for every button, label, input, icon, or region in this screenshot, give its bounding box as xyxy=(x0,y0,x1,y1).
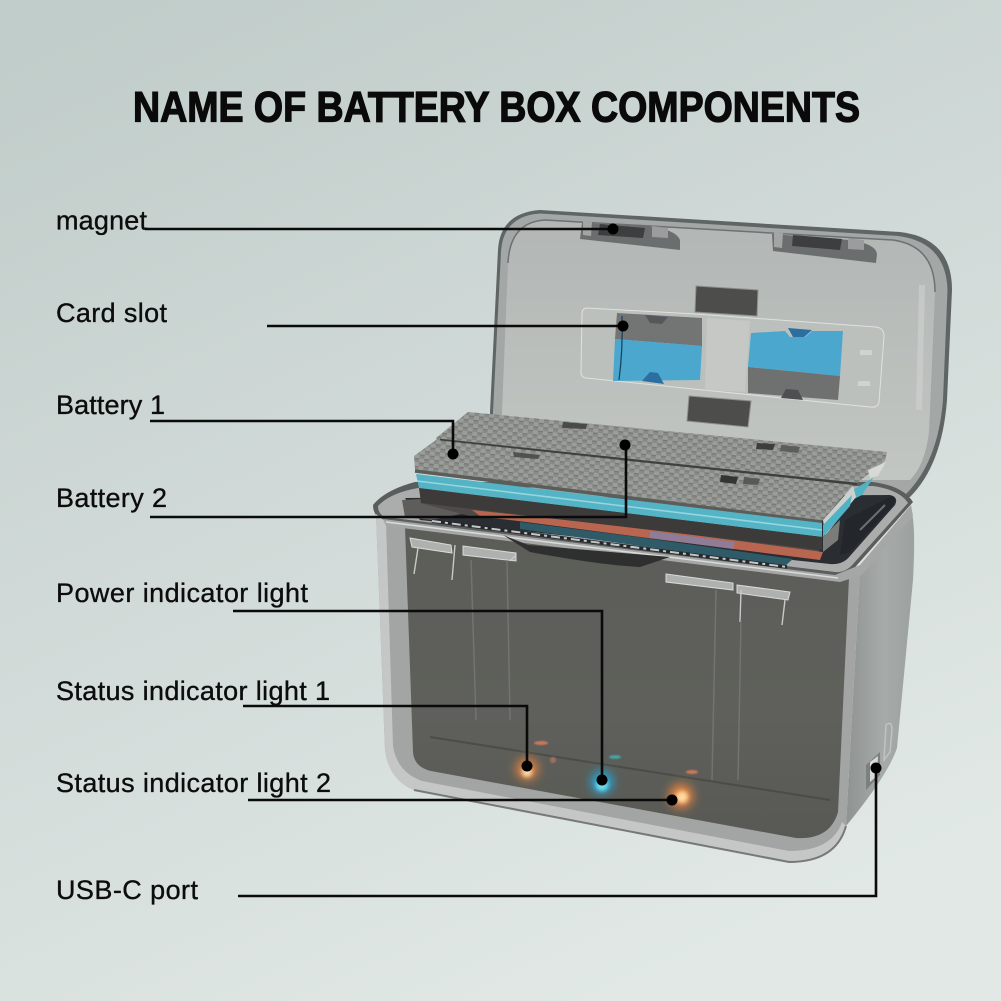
bright rim left and bottom xyxy=(376,514,846,862)
label: magnet: magnet xyxy=(56,206,147,236)
label: status indicator light 1: Status indicator light 1 xyxy=(56,676,330,706)
right side panel xyxy=(846,512,914,826)
label: status indicator light 2: Status indicator light 2 xyxy=(56,768,331,798)
battery dark underside xyxy=(419,488,822,550)
centre strip xyxy=(705,318,750,392)
label: battery 1: Battery 1 xyxy=(56,390,165,420)
rim glass xyxy=(378,486,908,572)
right memory card xyxy=(748,328,843,400)
salmon band xyxy=(472,510,823,560)
label: magnet xyxy=(56,206,618,236)
label: battery 2 xyxy=(56,440,630,517)
title: NAME OF BATTERY BOX COMPONENTS xyxy=(133,84,860,132)
box front body xyxy=(376,505,914,862)
dashed board edge xyxy=(432,521,787,567)
power light glow xyxy=(591,755,621,793)
label: power indicator light: Power indicator light xyxy=(56,578,308,608)
label: power indicator light xyxy=(56,578,608,786)
dark magnet bottom xyxy=(687,396,751,427)
battery box illustration xyxy=(373,210,952,862)
magnet holder right xyxy=(772,232,877,263)
interior left tones xyxy=(402,499,470,520)
card slot panel xyxy=(581,286,884,427)
dark tinted front xyxy=(405,527,849,838)
interior brown band xyxy=(420,503,820,556)
status light 1 glow xyxy=(516,741,556,780)
rim outer xyxy=(373,482,913,576)
lid seal front rim xyxy=(383,505,913,582)
dark edge above stripe xyxy=(415,471,822,522)
left memory card xyxy=(613,313,702,384)
battery 1 front pack xyxy=(414,440,856,552)
indicator lights xyxy=(516,741,698,808)
battery end cap xyxy=(823,486,856,536)
label: battery 2: Battery 2 xyxy=(56,483,167,513)
battery teal stripe xyxy=(416,474,822,537)
internal reflections xyxy=(471,560,741,780)
USB-C port xyxy=(866,723,892,790)
interior dark xyxy=(405,495,896,564)
box top rim and interior xyxy=(373,482,913,576)
dark outer bottom edge xyxy=(414,790,846,862)
battery 2 rear pack xyxy=(436,412,887,500)
clip left xyxy=(410,538,516,580)
inner right dark cavity xyxy=(840,496,895,555)
status light 2 glow xyxy=(669,770,698,808)
label: card slot xyxy=(56,298,628,332)
dark magnet top xyxy=(695,286,758,316)
label: USB-C port xyxy=(56,762,882,905)
label: USB-C port: USB-C port xyxy=(56,875,198,905)
teal circuit band xyxy=(520,522,793,566)
rear battery teal end xyxy=(852,468,880,500)
lavender patch xyxy=(650,531,735,549)
box outer shell xyxy=(376,514,860,862)
label: status indicator light 1 xyxy=(56,676,532,772)
open lid xyxy=(490,210,952,497)
clip right xyxy=(666,574,790,625)
label: status indicator light 2 xyxy=(56,768,678,806)
latch tab xyxy=(503,535,670,567)
label: card slot: Card slot xyxy=(56,298,167,328)
magnet holder left xyxy=(580,221,680,250)
label: battery 1 xyxy=(56,390,458,460)
